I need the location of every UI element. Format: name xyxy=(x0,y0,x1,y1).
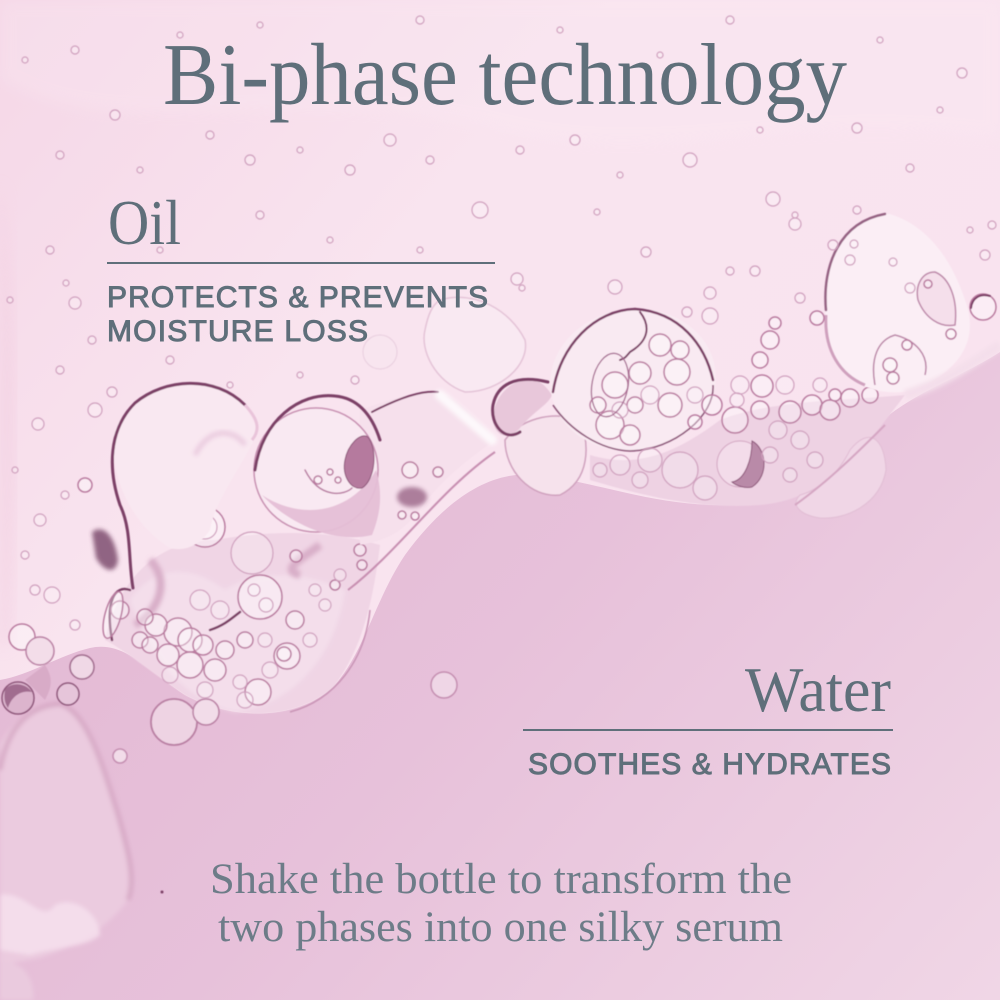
bubble: right lobe of left cluster xyxy=(348,392,495,590)
water heading: Water xyxy=(745,654,891,725)
closing instruction: two phases into one silky serum xyxy=(218,904,783,951)
oil description: PROTECTS & PREVENTS xyxy=(107,281,488,314)
water section xyxy=(523,654,893,781)
small bubbles: upper field xyxy=(7,16,996,630)
oil heading: Oil xyxy=(108,187,181,258)
title: Bi-phase technology xyxy=(163,27,847,124)
water description: SOOTHES & HYDRATES xyxy=(528,748,891,781)
bubble: faint drop behind copy xyxy=(363,297,526,392)
oil section xyxy=(107,187,497,348)
large drop bottom left xyxy=(0,704,132,1000)
big bubble: centre with inner crescent xyxy=(254,396,380,537)
big bubble: centre right with clustered interior xyxy=(493,298,725,495)
bubble group: right of centre xyxy=(590,317,905,518)
bubble cluster: left mass xyxy=(92,507,380,713)
upper oil phase xyxy=(0,0,1000,713)
floating bubbles: lower left xyxy=(2,624,457,894)
closing instruction: Shake the bottle to transform the xyxy=(210,856,792,903)
large bubble: upper right xyxy=(810,214,1000,395)
big bubble: left ring xyxy=(112,382,258,588)
oil description: MOISTURE LOSS xyxy=(107,315,368,348)
